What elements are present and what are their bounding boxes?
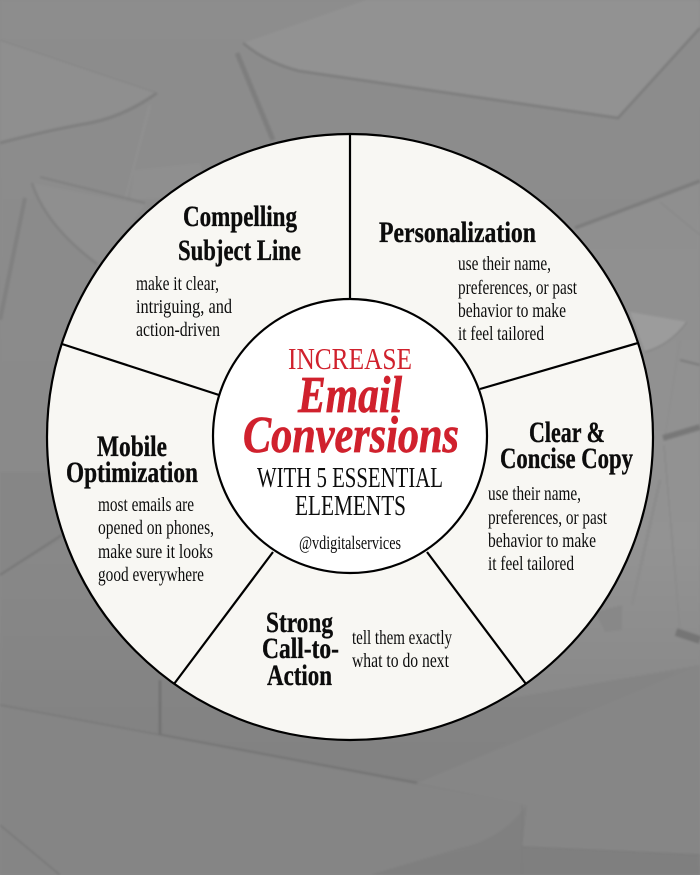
panel: personalization (379, 216, 577, 345)
panel: mobile optimization: most emails are (98, 495, 194, 516)
panel: clear and concise copy: it feel tailored (488, 554, 574, 575)
panel: clear and concise copy (488, 416, 633, 575)
panel: strong call-to-action: Call-to- (262, 632, 339, 665)
panel: mobile optimization: good everywhere (98, 565, 204, 586)
panel: personalization: Personalization (379, 216, 536, 249)
title (243, 341, 459, 464)
panel: compelling subject line: Subject Line (178, 234, 301, 267)
panel: clear and concise copy: Clear & (529, 416, 605, 449)
panel: strong call-to-action: tell them exactly (352, 628, 452, 649)
subtitle (257, 462, 443, 522)
outer wheel (47, 134, 653, 740)
panel: personalization: preferences, or past (458, 278, 577, 299)
title: Conversions (243, 407, 459, 464)
panel: strong call-to-action: Action (267, 659, 332, 692)
center circle (213, 299, 487, 573)
panel: mobile optimization: Mobile (97, 430, 167, 463)
panel: mobile optimization: make sure it looks (98, 542, 213, 563)
panel: mobile optimization: Optimization (66, 456, 198, 489)
subtitle: ELEMENTS (295, 490, 406, 522)
panel: clear and concise copy: use their name, (488, 484, 581, 505)
panel: compelling subject line: make it clear, (136, 274, 219, 295)
panel: strong call-to-action (262, 606, 452, 692)
panel: compelling subject line: action-driven (136, 320, 220, 341)
handle: @vdigitalservices (299, 534, 401, 554)
panel: compelling subject line: intriguing, and (136, 297, 232, 318)
title: INCREASE (288, 341, 412, 376)
panel: clear and concise copy: preferences, or past (488, 508, 607, 529)
title: Email (297, 367, 402, 424)
panel: strong call-to-action: Strong (266, 606, 333, 639)
subtitle: WITH 5 ESSENTIAL (257, 462, 443, 494)
panel: compelling subject line: Compelling (183, 200, 297, 233)
panel: clear and concise copy: behavior to make (488, 531, 596, 552)
panel: mobile optimization (66, 430, 214, 586)
panel: clear and concise copy: Concise Copy (500, 442, 633, 475)
panel: personalization: behavior to make (458, 301, 566, 322)
panel: personalization: it feel tailored (458, 324, 544, 345)
panel: personalization: use their name, (458, 254, 551, 275)
panel: mobile optimization: opened on phones, (98, 518, 214, 539)
panel: strong call-to-action: what to do next (352, 651, 449, 672)
panel: compelling subject line (136, 200, 301, 341)
